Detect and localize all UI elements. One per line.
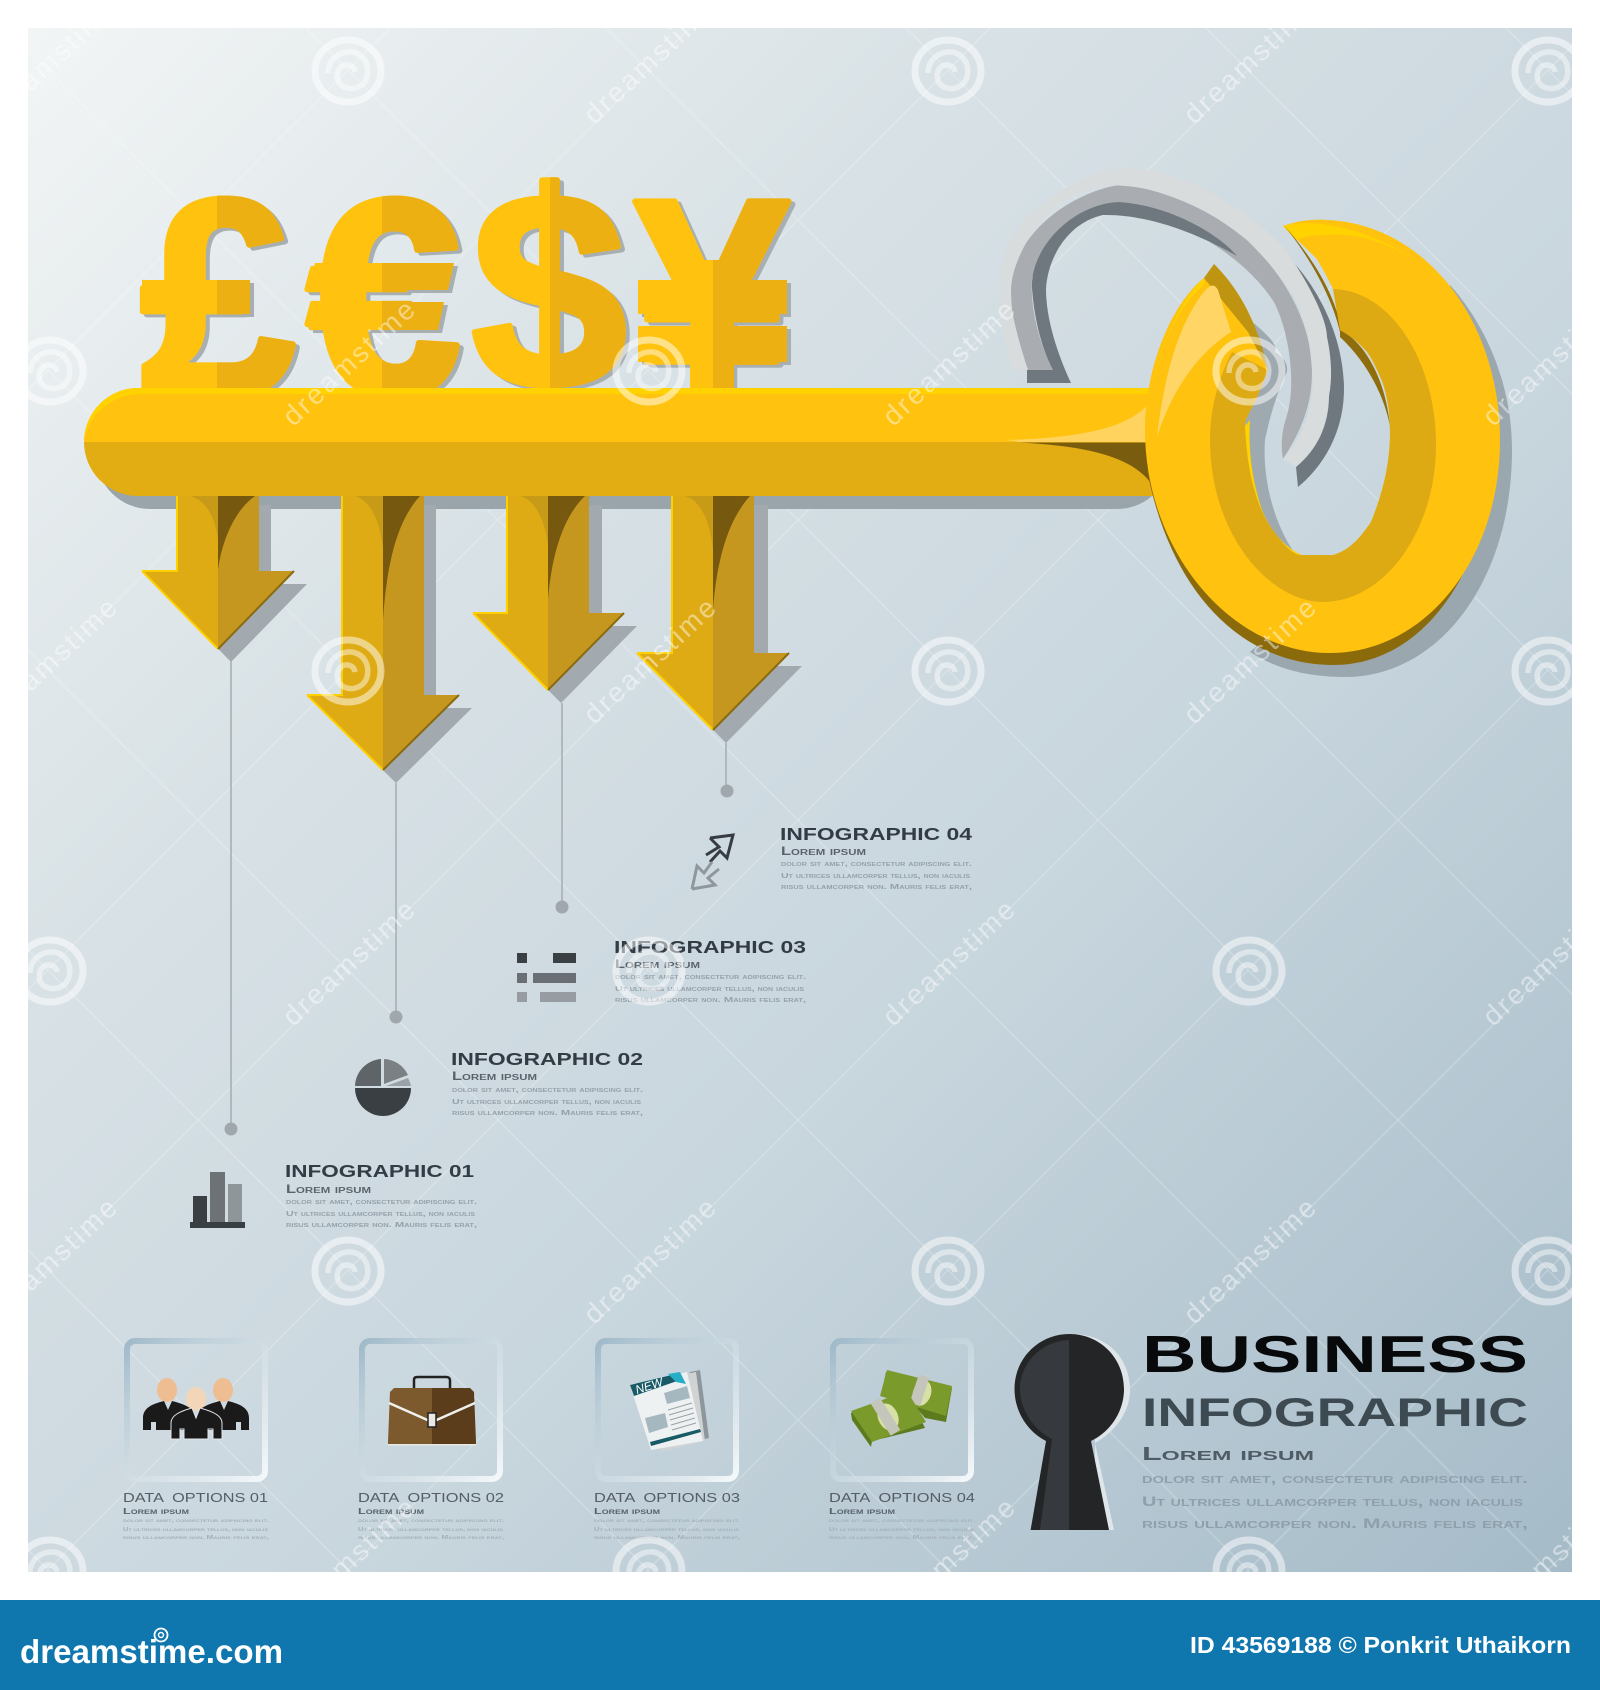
pound symbol: £ xyxy=(140,142,296,454)
text: option 1 description: dolor sit amet, consectetur adipiscing elit. xyxy=(123,1518,270,1524)
euro symbol: € xyxy=(306,142,462,454)
icon: newspaper: NEW xyxy=(634,1374,666,1397)
text: option 4 description: Ut ultrices ullamcorper tellus, non iaculis xyxy=(829,1527,974,1533)
text: option 3 description: dolor sit amet, consectetur adipiscing elit. xyxy=(594,1518,741,1524)
arrow 2 xyxy=(307,496,472,783)
footer logo: dreamstime.com xyxy=(20,1633,283,1670)
heading: infographic 03: INFOGRAPHIC 03 xyxy=(614,937,806,957)
text: option 2 description: Ut ultrices ullamcorper tellus, non iaculis xyxy=(358,1527,503,1533)
text: step 1 description: Lorem ipsum xyxy=(286,1184,371,1196)
text: step 4 description xyxy=(781,846,972,891)
label: data options 02: DATA OPTIONS 02 xyxy=(358,1491,504,1505)
dollar symbol xyxy=(472,177,630,388)
watermark wordmarks: dreamstime xyxy=(1177,590,1324,730)
yen symbol xyxy=(632,198,796,388)
footer image id: ID 43569188 © Ponkrit Uthaikorn xyxy=(1190,1632,1571,1658)
key: shaft xyxy=(84,388,1160,496)
text: step 4 description: dolor sit amet, consectetur adipiscing elit. xyxy=(781,859,972,868)
text: main description: risus ullamcorper non. Mauris felis erat, xyxy=(1142,1515,1528,1531)
text: step 2 description: risus ullamcorper non. Mauris felis erat, xyxy=(452,1108,643,1117)
pound symbol: £ xyxy=(144,145,300,457)
euro symbol: € xyxy=(306,142,462,454)
card frame xyxy=(833,1341,971,1479)
key: grey ring xyxy=(1000,168,1344,487)
euro symbol xyxy=(304,196,464,388)
yen symbol: ¥ xyxy=(638,145,796,457)
heading: infographic 01: INFOGRAPHIC 01 xyxy=(285,1161,474,1181)
step 1 block xyxy=(190,1161,477,1229)
text: step 4 description: risus ullamcorper non. Mauris felis erat, xyxy=(781,882,972,891)
text: step 1 description: Ut ultrices ullamcorper tellus, non iaculis xyxy=(286,1209,476,1218)
text: step 3 description: dolor sit amet, consectetur adipiscing elit. xyxy=(615,972,806,981)
text: step 3 description xyxy=(615,959,806,1004)
text: option 2 description: risus ullamcorper non. Mauris felis erat, xyxy=(358,1535,505,1541)
text: step 2 description: Lorem ipsum xyxy=(452,1071,537,1083)
text: step 3 description: Lorem ipsum xyxy=(615,959,700,971)
text: step 4 description: Lorem ipsum xyxy=(781,846,866,858)
icon: opposing arrows xyxy=(692,835,733,889)
text: step 2 description: Ut ultrices ullamcorper tellus, non iaculis xyxy=(452,1097,642,1106)
label: data options 03: DATA OPTIONS 03 xyxy=(594,1491,740,1505)
step 2 block xyxy=(355,1049,643,1117)
text: option 3 description: risus ullamcorper non. Mauris felis erat, xyxy=(594,1535,741,1541)
text: option 3 description: Lorem ipsum xyxy=(594,1506,660,1516)
watermark wordmarks: dreamstime xyxy=(1177,1190,1324,1330)
data option 4 xyxy=(829,1341,976,1541)
text: option 2 description: dolor sit amet, consectetur adipiscing elit. xyxy=(358,1518,505,1524)
watermark wordmarks: dreamstime xyxy=(876,1490,1023,1630)
icon: briefcase xyxy=(388,1377,476,1446)
text: option 4 description: Lorem ipsum xyxy=(829,1506,895,1516)
text: option 4 description: risus ullamcorper non. Mauris felis erat, xyxy=(829,1535,976,1541)
text: option 1 description xyxy=(123,1506,270,1541)
key: currency symbols xyxy=(140,177,796,388)
heading: infographic 02: INFOGRAPHIC 02 xyxy=(451,1049,643,1069)
text: option 4 description xyxy=(829,1506,976,1541)
text: step 2 description xyxy=(452,1071,643,1117)
pound symbol: £ xyxy=(140,142,296,454)
text: step 3 description: Ut ultrices ullamcorper tellus, non iaculis xyxy=(615,984,805,993)
title: business infographic: BUSINESS xyxy=(1142,1326,1528,1384)
text: option 3 description xyxy=(594,1506,741,1541)
yen symbol: ¥ xyxy=(634,142,792,454)
data option 3 xyxy=(594,1341,741,1541)
label: data options 04: DATA OPTIONS 04 xyxy=(829,1491,975,1505)
title: business infographic xyxy=(1142,1326,1528,1435)
text: main description: Ut ultrices ullamcorper tellus, non iaculis xyxy=(1142,1493,1523,1509)
icon: business people xyxy=(143,1378,249,1439)
euro symbol: € xyxy=(310,145,466,457)
footer bar xyxy=(0,1600,1600,1690)
watermark wordmarks: dreamstime xyxy=(276,292,423,432)
card frame xyxy=(598,1341,736,1479)
key: arrow teeth xyxy=(142,496,802,783)
dollar symbol: $ xyxy=(475,139,631,451)
text: option 3 description: Ut ultrices ullamcorper tellus, non iaculis xyxy=(594,1527,739,1533)
text: main description: Lorem ipsum xyxy=(1142,1444,1314,1464)
dollar symbol: $ xyxy=(471,136,627,448)
dollar symbol: $ xyxy=(471,136,627,448)
watermark wordmarks: dreamstime xyxy=(276,892,423,1032)
icon: list xyxy=(517,953,576,1002)
data option 2 xyxy=(358,1341,505,1541)
text: option 1 description: Lorem ipsum xyxy=(123,1506,189,1516)
key: ring head xyxy=(1145,220,1500,665)
icon: pie chart xyxy=(355,1059,411,1116)
heading: infographic 04: INFOGRAPHIC 04 xyxy=(780,824,972,844)
key: shaft shadow xyxy=(96,401,1171,509)
text: step 1 description: dolor sit amet, consectetur adipiscing elit. xyxy=(286,1197,477,1206)
arrow 3 xyxy=(473,496,637,703)
icon: bar chart xyxy=(190,1172,245,1228)
step 4 block xyxy=(692,824,972,891)
arrow 1 xyxy=(142,496,307,662)
arrow 4 xyxy=(637,496,802,743)
text: step 1 description: risus ullamcorper non. Mauris felis erat, xyxy=(286,1220,477,1229)
icon: newspaper xyxy=(630,1370,709,1452)
text: step 3 description: risus ullamcorper non. Mauris felis erat, xyxy=(615,995,806,1004)
text: step 2 description: dolor sit amet, consectetur adipiscing elit. xyxy=(452,1085,643,1094)
card frame xyxy=(362,1341,500,1479)
text: option 2 description: Lorem ipsum xyxy=(358,1506,424,1516)
watermark wordmarks: dreamstime xyxy=(577,1190,724,1330)
text: step 1 description xyxy=(286,1184,477,1229)
title: business infographic: INFOGRAPHIC xyxy=(1142,1391,1528,1435)
text: step 4 description: Ut ultrices ullamcorper tellus, non iaculis xyxy=(781,871,971,880)
text: option 1 description: Ut ultrices ullamcorper tellus, non iaculis xyxy=(123,1527,268,1533)
label: data options 01: DATA OPTIONS 01 xyxy=(123,1491,268,1505)
watermark wordmarks: dreamstime xyxy=(876,292,1023,432)
yen symbol: ¥ xyxy=(634,142,792,454)
text: option 4 description: dolor sit amet, consectetur adipiscing elit. xyxy=(829,1518,976,1524)
watermark wordmarks: dreamstime xyxy=(876,892,1023,1032)
watermark wordmarks: dreamstime xyxy=(276,1490,423,1630)
text: option 1 description: risus ullamcorper non. Mauris felis erat, xyxy=(123,1535,270,1541)
step 3 block xyxy=(517,937,806,1004)
connector lines and dots xyxy=(224,661,734,1136)
key: ring head shadow xyxy=(1250,285,1512,677)
watermark wordmarks: dreamstime xyxy=(577,590,724,730)
data option 1 xyxy=(123,1341,270,1541)
pound symbol xyxy=(140,196,300,388)
icon: keyhole xyxy=(1014,1334,1130,1530)
icon: money bundles xyxy=(851,1370,952,1447)
text: main description: dolor sit amet, consectetur adipiscing elit. xyxy=(1142,1470,1528,1486)
text: option 2 description xyxy=(358,1506,505,1541)
text: main description xyxy=(1142,1444,1528,1531)
card frame xyxy=(127,1341,265,1479)
